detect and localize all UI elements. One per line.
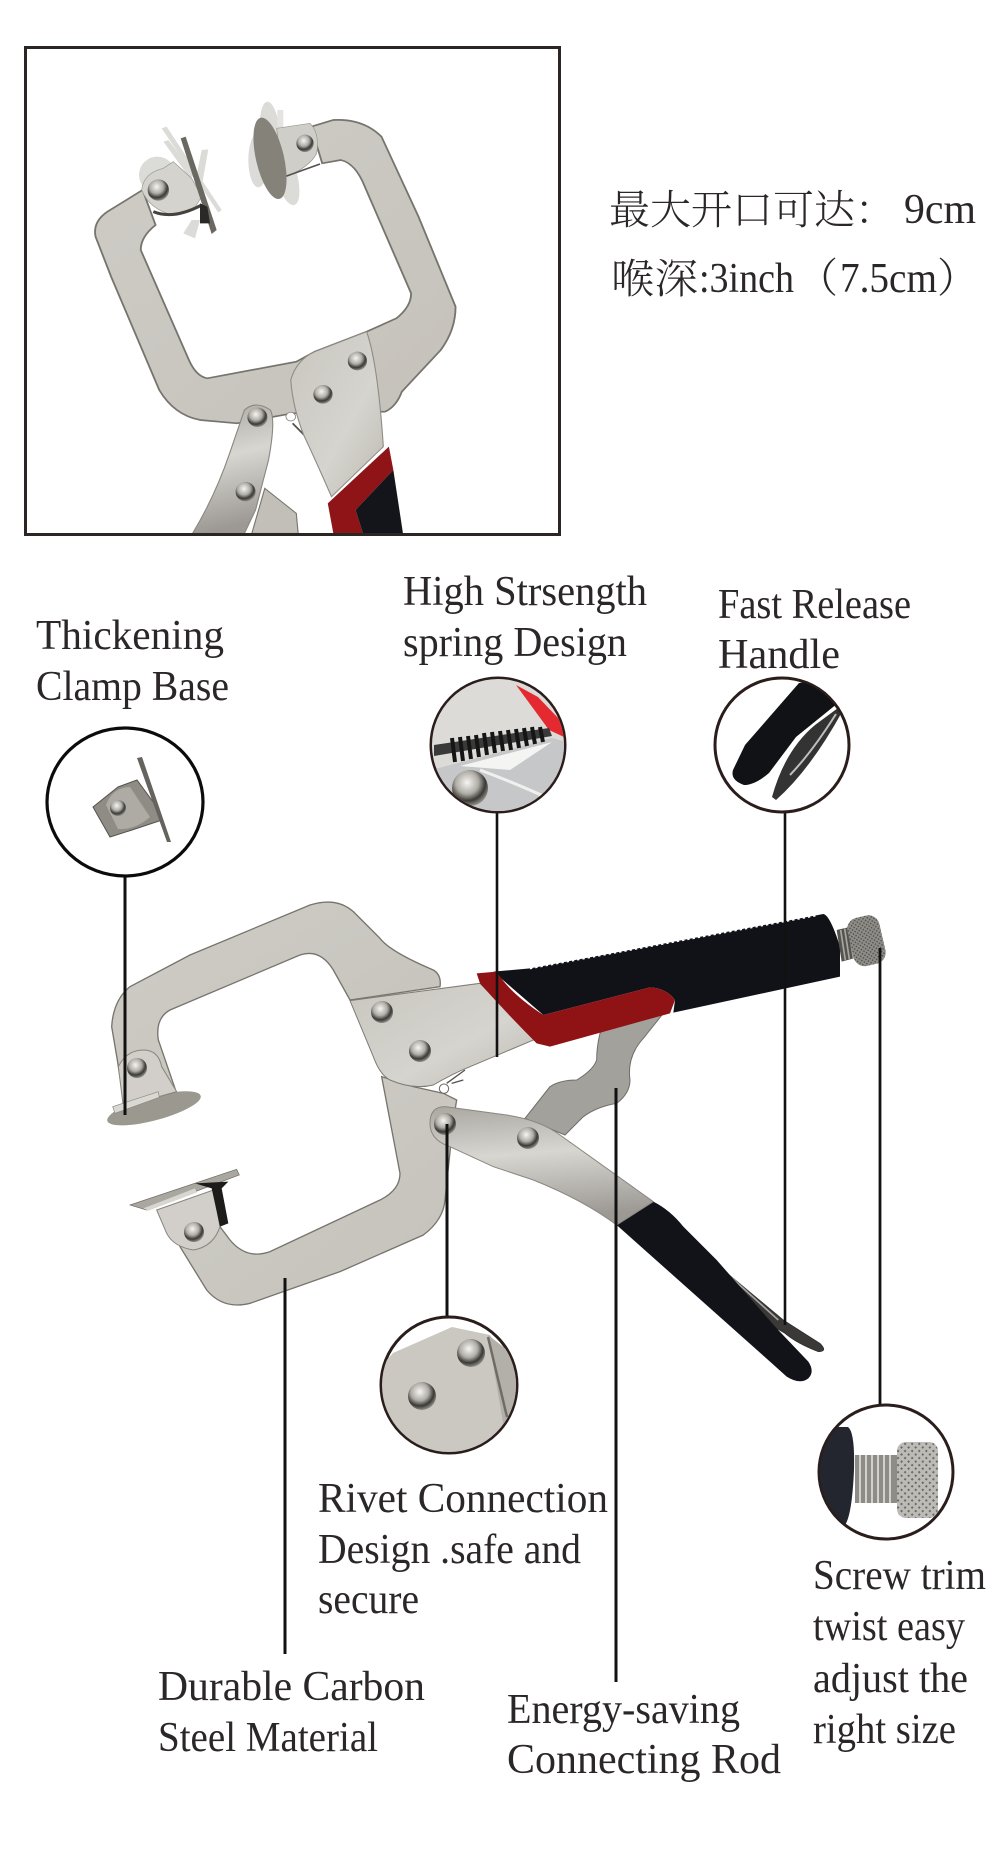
right swivel: [277, 123, 317, 177]
lower link arm: [252, 488, 298, 533]
spec text: jaw opening and throat depth: 最大开口可达：: [609, 177, 896, 236]
callout: fast release handle: Handle: [718, 632, 840, 678]
lower jaw: [180, 1077, 457, 1305]
callout: thickening clamp base: Clamp Base: [36, 664, 229, 710]
label: Fast Release: [718, 582, 911, 628]
release handle close-up: [732, 683, 842, 800]
spring eye: [439, 1084, 449, 1093]
callout: screw trim: right size: [813, 1707, 956, 1753]
spec text: jaw opening and throat depth: 喉深: [611, 246, 698, 305]
label: durable carbon steel: Durable Carbon: [158, 1664, 425, 1710]
spec text: jaw opening and throat depth: [609, 177, 978, 305]
connecting rod: [525, 1013, 663, 1135]
detail circle: [431, 678, 565, 812]
detail circle: [381, 1317, 517, 1453]
rivets: [236, 352, 367, 501]
screw close-up: [820, 1427, 938, 1524]
panel: jaw opening photo: [26, 48, 560, 534]
rivet close-up: [382, 1327, 516, 1452]
label: connecting rod: [507, 1687, 781, 1783]
label: connecting rod: Energy-saving: [507, 1687, 740, 1733]
detail circle: [47, 728, 203, 876]
photo: open clamp jaws: [95, 101, 456, 533]
clamp jaws: [104, 902, 535, 1305]
callout: screw trim: adjust the: [813, 1656, 968, 1702]
release lever: [723, 1270, 824, 1352]
callout: fast release handle: [715, 582, 911, 812]
callout: screw trim: twist easy: [813, 1604, 965, 1650]
spec text: jaw opening and throat depth: ）: [937, 245, 978, 304]
main product: locking C-clamp pliers: [104, 902, 888, 1381]
handle plate: [291, 332, 383, 497]
callout: thickening clamp base: [36, 613, 229, 876]
motion-blurred swivel pads: [139, 101, 320, 238]
screw thread: [837, 925, 860, 962]
label: Screw trim: [813, 1553, 986, 1599]
spec text: jaw opening and throat depth: :3inch: [699, 256, 794, 302]
clamp base icon: [93, 757, 171, 842]
handles and adjustment screw: [430, 913, 888, 1381]
lower swivel pad: [130, 1169, 239, 1210]
black grip: [356, 470, 403, 533]
label: High Strsength: [403, 569, 647, 615]
red grip: [328, 447, 393, 533]
right swivel ghosts: [248, 102, 300, 206]
handle plate: [350, 983, 535, 1087]
callout: screw trim: [813, 1405, 986, 1753]
label: Thickening: [36, 613, 224, 659]
callout: rivet connection: secure: [318, 1577, 419, 1623]
upper swivel pad: [104, 1084, 204, 1132]
callout: spring design: spring Design: [403, 620, 627, 666]
knurled screw knob: [845, 913, 888, 968]
spec text: jaw opening and throat depth: （: [797, 245, 838, 304]
spring hole: [286, 412, 296, 421]
label: durable carbon steel: [158, 1664, 425, 1761]
detail circle: [819, 1405, 953, 1539]
leader lines: [125, 750, 880, 1682]
callout: rivet connection: Design .safe and: [318, 1527, 581, 1573]
spec text: jaw opening and throat depth: 7.5cm: [840, 256, 937, 302]
frame: [26, 48, 560, 534]
left swivel ghosts: [139, 127, 222, 238]
label: connecting rod: Connecting Rod: [507, 1737, 781, 1783]
upper jaw: [112, 902, 440, 1100]
lower handle metal arm: [430, 1107, 653, 1225]
label: durable carbon steel: Steel Material: [158, 1715, 378, 1761]
spring close-up: [431, 678, 566, 812]
callout: rivet connection: [318, 1317, 608, 1623]
left swivel: [142, 162, 202, 215]
C clamp body: [95, 120, 456, 423]
upper handle red insert: [477, 972, 675, 1047]
spec text: jaw opening and throat depth: 9cm: [904, 187, 976, 233]
label: Rivet Connection: [318, 1476, 608, 1522]
callout: spring design: [403, 569, 647, 812]
rivets: [127, 1001, 539, 1242]
detail circle: [715, 678, 849, 812]
upper handle black grip: [493, 914, 840, 1015]
lower handle black grip: [617, 1202, 812, 1381]
